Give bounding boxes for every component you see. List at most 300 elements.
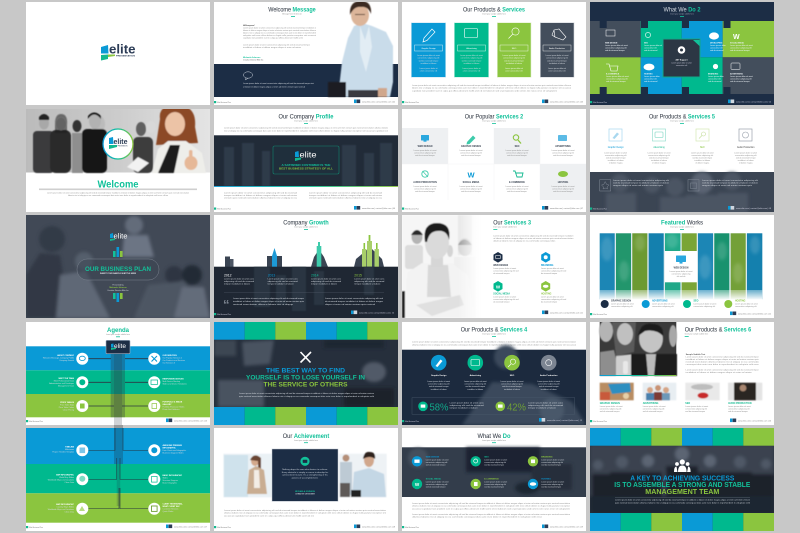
service: graphic design bbox=[460, 136, 483, 157]
card: seo: amet consectetur elit bbox=[505, 70, 523, 72]
item: price tables: PRICE TABLES bbox=[60, 401, 75, 404]
subtitle bbox=[670, 120, 694, 124]
band text: Lorem ipsum dolor sit amet consectetur adipiscing elit bbox=[702, 179, 759, 182]
thumb: graphic design: consectetur adipiscing elit bbox=[600, 408, 622, 410]
divider bar bbox=[39, 188, 197, 190]
service: web design: do eiusmod tempor bbox=[493, 272, 510, 275]
message text: Hi Everyone ! bbox=[243, 25, 255, 27]
item: responsive devices bbox=[148, 376, 187, 388]
item: timeline: TIMELINE bbox=[65, 446, 75, 448]
labels and text: Lorem ipsum dolor bbox=[708, 75, 724, 78]
quote text: do eiusmod tempor incididunt ut labore et dolore magna bbox=[325, 300, 384, 303]
feature: audio production: consectetur adipiscing elit bbox=[538, 383, 560, 386]
slide: welcome message bbox=[214, 1, 398, 105]
quote box: A SATISFIED CUSTOMER IS THE bbox=[282, 163, 331, 167]
feature: audio production: Lorem ipsum dolor sit amet bbox=[537, 380, 561, 383]
message text: Lorem ipsum dolor sit amet consectetur adipiscing elit sed do eiusmod tempor bbox=[243, 44, 310, 46]
center card: web design: consectetur adipiscing bbox=[672, 272, 690, 276]
service: hosting: consectetur adipiscing elit bbox=[552, 188, 574, 190]
timeline: 2014 bbox=[311, 274, 341, 286]
labels and text: W bbox=[733, 34, 740, 41]
subtitle bbox=[482, 439, 506, 443]
stat: 42 percent: Lorem ipsum dolor sit amet cons bbox=[528, 402, 563, 404]
logo box bbox=[106, 340, 130, 354]
feature: graphic design: et dolore magna bbox=[609, 162, 623, 164]
labels and text: consectetur adipiscing elit bbox=[730, 78, 752, 80]
footer bbox=[542, 310, 583, 315]
card: advertising: Lorem ipsum dolor sit amet bbox=[460, 54, 483, 57]
service: web design: consectetur adipiscing elit sed bbox=[493, 270, 519, 272]
timeline: 2015: tempor incididunt ut labore bbox=[354, 282, 380, 286]
band text bbox=[243, 82, 314, 88]
feature: graphic design: consectetur adipiscing elit bbox=[428, 383, 450, 386]
icon: team bbox=[674, 459, 691, 472]
item: e-commerce: Lorem ipsum dolor sit amet bbox=[484, 480, 508, 483]
footer bbox=[402, 524, 583, 529]
item: meet the team: Meet Professional Team bbox=[54, 380, 74, 382]
item: hosting: HOSTING bbox=[735, 300, 746, 302]
item: basic infographic: Slides bbox=[162, 478, 168, 480]
footer bbox=[590, 100, 771, 104]
stat: 42 percent bbox=[496, 402, 563, 413]
footer bbox=[214, 310, 394, 316]
footer: www.elite.com | contact@elite.com | 04 bbox=[736, 101, 771, 104]
service: audio production: sed do eiusmod tempor bbox=[415, 190, 435, 193]
labels and text: consectetur elit bbox=[644, 46, 657, 50]
slide: key to achieving success quote bbox=[590, 428, 774, 531]
logo badge: PRESENTATION bbox=[118, 144, 127, 148]
subtitle bbox=[482, 13, 506, 17]
labels and text: HOSTING bbox=[644, 74, 653, 76]
slide: welcome bbox=[26, 105, 210, 212]
footer bbox=[402, 206, 583, 210]
item: social media: Lorem ipsum dolor sit amet bbox=[426, 480, 449, 483]
labels and text: sed do eiusmod tempor bbox=[606, 80, 626, 83]
photo: businesswoman and team bbox=[402, 215, 480, 318]
labels and text bbox=[605, 30, 753, 83]
service: social media: consectetur adipiscing elit bbox=[460, 188, 482, 190]
feature: seo: et dolore magna bbox=[695, 162, 710, 164]
center box: 24/7 support: consectetur elit bbox=[676, 64, 688, 67]
quote text: aliqua ut enim ad minim veniam quis nostrud bbox=[325, 303, 375, 306]
item: price tables: Price Table Style bbox=[60, 404, 74, 406]
quote text: quis nostrud exercitation ullamco laboris nisi ut aliquip ex ea commodo consequat duis aute irure dolor in reprehenderit in voluptate velit bbox=[239, 395, 375, 398]
body text: consequat duis aute irure dolor in reprehenderit in voluptate velit esse bbox=[686, 363, 759, 366]
item: client testimonial: Quote Slides bbox=[162, 510, 173, 513]
navy band bbox=[214, 64, 398, 97]
pill heading: OUR BUSINESS PLAN bbox=[85, 266, 152, 273]
item: branding: consectetur adipiscing elit bbox=[541, 461, 563, 464]
timeline: 2013: adipiscing elit sed do eiusmod bbox=[268, 280, 298, 283]
footer: Elite Business Plan bbox=[405, 208, 419, 210]
service: hosting: consectetur adipiscing elit sed bbox=[541, 298, 566, 301]
band text: sed do eiusmod tempor incididunt ut labore et dolore bbox=[613, 182, 669, 184]
title: Company Growth bbox=[283, 220, 329, 227]
service: hosting: sed do eiusmod tempor bbox=[553, 190, 573, 193]
item: portfolio and image gallery: Photo Grid Galleries bbox=[162, 408, 180, 411]
subtitle bbox=[482, 333, 506, 337]
icon: bars bottom bbox=[113, 293, 123, 302]
stats box bbox=[412, 398, 575, 414]
connectors bbox=[88, 359, 148, 406]
item: seo: consectetur adipiscing elit bbox=[484, 461, 506, 464]
center card: web design: Lorem ipsum dolor sit amet bbox=[670, 270, 693, 273]
item: our services: Our Popular Services 2 bbox=[162, 356, 182, 360]
logo: elite: elite bbox=[109, 42, 136, 56]
quote text: nostrud exercitation ullamco laboris nisi ut aliquip bbox=[233, 303, 293, 306]
quote heading: A KEY TO ACHIEVING SUCCESS bbox=[630, 475, 735, 482]
labels and text: consectetur elit bbox=[708, 78, 721, 80]
footer bbox=[402, 100, 583, 104]
item: e-commerce: sed do eiusmod tempor bbox=[484, 485, 504, 488]
feature: graphic design: Graphic Design bbox=[431, 374, 447, 377]
footer bbox=[26, 418, 207, 423]
title: Our Products & Services 6 bbox=[685, 327, 752, 334]
band text: Lorem ipsum dolor sit amet consectetur adipiscing elit sed do eiusmod tempor inci bbox=[243, 82, 315, 85]
card: advertising: incididunt ut labore bbox=[464, 62, 479, 65]
timeline: 2012: tempor incididunt ut labore bbox=[224, 282, 250, 286]
icon: screen bbox=[464, 28, 478, 38]
item: responsive devices: RESPONSIVE DEVICES bbox=[162, 378, 184, 380]
footer: www.elite.com | contact@elite.com | 18 bbox=[362, 526, 395, 529]
labels and text: sed do eiusmod bbox=[644, 50, 657, 52]
stat: 58 percent bbox=[418, 402, 484, 413]
presenter: Presented by bbox=[112, 283, 124, 286]
footer: www.elite.com | contact@elite.com | 06 bbox=[362, 207, 395, 210]
item: about company: Company Growth bbox=[59, 359, 74, 362]
item: our services: OUR SERVICES bbox=[162, 355, 177, 357]
service: hosting bbox=[552, 171, 575, 193]
item: price tables bbox=[59, 400, 88, 412]
grid cells bbox=[402, 128, 586, 200]
presenter: Michaela Johnson bbox=[109, 287, 127, 289]
item: meet the team: Management Team bbox=[58, 384, 74, 388]
item: portfolio and image gallery: PORTFOLIO & IMAGE bbox=[162, 400, 183, 404]
service: social media: do eiusmod tempor bbox=[493, 300, 510, 304]
title: What We Do bbox=[478, 433, 511, 440]
footer: Elite Business Plan bbox=[593, 313, 607, 316]
icon: teal badge bbox=[300, 457, 310, 466]
card: graphic design bbox=[411, 23, 446, 77]
footer: Elite Business Plan bbox=[29, 526, 43, 529]
card: advertising: amet consectetur elit bbox=[463, 70, 481, 72]
item: hosting bbox=[528, 479, 565, 489]
body text: ullamco laboris nisi ut aliquip ex ea commodo consequat duis aute irure dolor in reprehenderit in voluptate velit esse cillum dolore eu fugiat nulla pariatur excepteur sint bbox=[224, 512, 387, 515]
service: web design bbox=[414, 135, 437, 157]
card: audio production: amet consectetur elit bbox=[548, 70, 566, 72]
intro text: ullamco laboris nisi ut aliquip ex ea commodo consequat duis aute irure dolor in reprehenderit in voluptate velit esse cillum dolore eu fugiat nulla pariatur sint occaecat bbox=[412, 343, 577, 346]
subtitle: Insert your sample subtitle here bbox=[685, 333, 708, 336]
card: seo bbox=[497, 23, 531, 77]
thumb: graphic design: sed do eiusmod tempor bbox=[600, 410, 620, 413]
item: map infographic: MAP INFOGRAPHIC bbox=[56, 474, 75, 476]
feature: graphic design: Graphic Design bbox=[608, 146, 624, 149]
feature: seo bbox=[691, 129, 714, 164]
dark photo band bbox=[402, 345, 586, 425]
timeline: 2012 bbox=[224, 274, 254, 286]
item: branding: Lorem ipsum dolor sit amet bbox=[541, 458, 565, 461]
feature: audio production: consectetur adipiscing elit bbox=[735, 154, 757, 157]
card: audio production: Lorem ipsum dolor sit bbox=[548, 67, 567, 70]
body text: Lorem ipsum dolor sit amet consectetur adipiscing elit sed do eiusmod tempor incididunt ut labore et dolore magna aliqua ut enim ad minim veniam quis nostrud exercitation bbox=[412, 502, 570, 505]
card: advertising bbox=[454, 23, 489, 77]
icon: pencil bbox=[423, 29, 435, 42]
logo: elite bbox=[114, 234, 128, 240]
service: web design: consectetur adipiscing elit bbox=[414, 152, 436, 154]
item: client testimonial: WHAT CLIENT SAY bbox=[162, 505, 180, 508]
service: web design: WEB DESIGN bbox=[418, 146, 433, 148]
stat: 42 percent: tempor incididunt ut labore bbox=[528, 406, 556, 410]
slide: our products and services 5 bbox=[590, 109, 774, 213]
footer: Elite Business Plan bbox=[217, 313, 231, 316]
item: web design: Lorem ipsum dolor sit amet bbox=[426, 458, 449, 461]
service: web design: Lorem ipsum dolor sit amet bbox=[414, 149, 437, 152]
center card: Every obstacle is simply a course to develop his bbox=[282, 471, 329, 474]
feature: graphic design: Lorem ipsum dolor sit amet bbox=[427, 380, 451, 383]
stat: 58 percent: 58% bbox=[430, 402, 449, 413]
service: graphic design: Lorem ipsum dolor sit amet bbox=[460, 149, 483, 152]
item: branding bbox=[528, 456, 565, 466]
card: audio production: Audio Production bbox=[549, 47, 566, 50]
item: awesome premium infographic: Data Charts and Infographic bbox=[162, 449, 186, 452]
item: meet the team: MEET THE TEAM bbox=[59, 377, 74, 380]
quote text bbox=[233, 297, 384, 306]
logo badge: elite bbox=[114, 137, 128, 146]
footer bbox=[214, 524, 395, 529]
item: meet the team bbox=[49, 376, 88, 388]
item: social media: consectetur adipiscing elit bbox=[426, 483, 448, 486]
photo: business people bbox=[26, 105, 210, 173]
logo box: elite bbox=[114, 343, 126, 350]
icon: speech bubble bbox=[243, 72, 253, 80]
title: Our Popular Services 2 bbox=[465, 114, 524, 121]
service: seo bbox=[506, 135, 529, 157]
signature: Michaela Johnson bbox=[243, 57, 261, 59]
intro text bbox=[493, 234, 574, 242]
item: seo: sed do eiusmod tempor bbox=[484, 463, 504, 466]
icon: bars top bbox=[113, 247, 123, 257]
item: awesome premium infographic: INFOGRAPHIC bbox=[162, 446, 176, 450]
feature: seo: consectetur adipiscing elit bbox=[691, 154, 714, 157]
body text: Lorem ipsum dolor sit amet consectetur adipiscing elit sed do eiusmod tempor incididunt ut labore et dolore magna aliqua ut enim ad minim veniam quis nostrud exercitation bbox=[412, 513, 570, 516]
service: e-commerce: sed do eiusmod tempor bbox=[507, 190, 527, 193]
colored bands bbox=[26, 428, 210, 523]
feature: audio production: sed do eiusmod tempor bbox=[539, 385, 559, 388]
subtitle bbox=[106, 333, 130, 337]
card: audio production: incididunt ut labore bbox=[549, 62, 565, 65]
center card: Nothing drops the man who desires to achieve. bbox=[282, 468, 328, 471]
intro text bbox=[412, 340, 577, 346]
feature: audio production: Audio Production bbox=[540, 374, 558, 377]
quote box: elite bbox=[300, 150, 317, 160]
labels and text: SEO bbox=[644, 42, 649, 44]
pill heading: INSERT YOUR SAMPLE SUBTITLE HERE bbox=[100, 272, 137, 275]
slide: what we do bbox=[402, 428, 586, 531]
item: about company: Welcome Message, Company Profile bbox=[43, 356, 74, 360]
item: seo: Lorem ipsum dolor sit amet bbox=[484, 458, 508, 461]
title: Welcome Message bbox=[268, 7, 316, 14]
footer: Elite Business Plan bbox=[405, 526, 419, 529]
subtitle bbox=[294, 120, 318, 124]
band text bbox=[613, 179, 759, 187]
center box: 24/7 support bbox=[663, 39, 700, 77]
service: e-commerce: Lorem ipsum dolor sit amet bbox=[506, 185, 529, 188]
skyline buildings bbox=[225, 235, 384, 267]
intro text: nisi ut aliquip ex ea commodo consequat duis aute irure dolor in reprehenderit in voluptate velit esse cillum dolore eu fugiat nulla pariatur excepteur sint occaecat cupidatat non bbox=[224, 129, 388, 132]
feature: advertising: incididunt ut labore bbox=[651, 159, 667, 162]
city band bbox=[214, 135, 398, 187]
footer: www.elite.com | contact@elite.com | 08 bbox=[736, 207, 771, 210]
icon: speaker bbox=[552, 29, 566, 40]
service: graphic design: sed do eiusmod tempor bbox=[461, 154, 481, 157]
feature: audio production bbox=[537, 355, 561, 391]
subtitle bbox=[294, 226, 318, 230]
footer: www.elite.com | contact@elite.com | 07 bbox=[550, 207, 583, 210]
labels and text: E-COMMERCE bbox=[606, 74, 620, 76]
service: social media: W bbox=[496, 284, 501, 289]
subtitle: Insert your sample subtitle here bbox=[670, 120, 694, 123]
subtitle bbox=[294, 439, 318, 443]
connectors bbox=[88, 428, 148, 509]
center card bbox=[272, 449, 338, 501]
quote text: Lorem ipsum dolor sit amet consectetur adipiscing elit sed do eiusmod tempor bbox=[233, 297, 304, 300]
quote text: incididunt ut labore et dolore magna aliqua ut enim ad minim veniam quis bbox=[233, 300, 304, 303]
item: advertising: consectetur adipiscing elit bbox=[652, 305, 674, 308]
center card: MICHAELA JOHNSON bbox=[295, 490, 316, 493]
slide: our popular services 2 bbox=[402, 109, 586, 212]
photo: man with colleague bbox=[339, 452, 387, 497]
subtitle: Insert your sample subtitle here bbox=[482, 120, 506, 123]
item: seo: SEO bbox=[694, 300, 699, 302]
thumb: advertising bbox=[643, 383, 676, 413]
logo bbox=[110, 233, 128, 241]
photo: desk bbox=[214, 340, 394, 407]
item: graphic design: GRAPHIC DESIGN bbox=[611, 300, 631, 302]
item: map infographic second: Country Maps Slides bbox=[57, 506, 74, 508]
item: web design: sed do eiusmod tempor bbox=[426, 463, 446, 466]
band text: ut labore et dolore magna aliqua ut enim ad minim veniam quis nostrud bbox=[243, 86, 305, 88]
thumb: graphic design bbox=[600, 383, 634, 413]
footer: Elite Business Plan bbox=[405, 420, 419, 423]
footer: www.elite.com | contact@elite.com | 03 bbox=[550, 101, 583, 104]
service: e-commerce: consectetur adipiscing elit bbox=[506, 188, 528, 190]
item: seo: SEO bbox=[484, 457, 489, 459]
item: client testimonial: Customer Reviews bbox=[162, 508, 178, 510]
subtitle bbox=[282, 13, 302, 17]
labels and text: sed do eiusmod bbox=[708, 81, 721, 83]
thumb: seo bbox=[685, 383, 720, 413]
intro text: ut labore et dolore magna aliqua ut enim ad minim veniam quis nostrud exercitation bbox=[493, 237, 573, 240]
mosaic bottom bbox=[214, 407, 398, 425]
center box: 24/7 support: Lorem ipsum dolor sit amet bbox=[671, 62, 692, 64]
footer: Elite Business Plan bbox=[29, 420, 43, 423]
dark city band bbox=[214, 267, 398, 318]
labels and text: Lorem ipsum dolor sit bbox=[644, 44, 663, 47]
item: social media: SOCIAL MEDIA bbox=[426, 478, 441, 481]
title: Our Services 3 bbox=[493, 220, 531, 227]
band text: magna aliqua ut enim ad minim veniam quis bbox=[613, 184, 663, 187]
message text: voluptate velit esse cillum dolore eu fugiat nulla pariatur excepteur sint occaecat bbox=[243, 34, 317, 37]
title: Our Company Profile bbox=[278, 114, 334, 121]
message text: incididunt ut labore et dolore magna aliqua ut enim ad minim bbox=[243, 46, 301, 49]
item: hosting: sed do eiusmod tempor bbox=[541, 485, 561, 488]
feature: audio production: sed do eiusmod tempor bbox=[736, 156, 756, 160]
body text: Lorem ipsum dolor sit amet consectetur adipiscing elit sed do eiusmod tempor incididunt ut labore et dolore magna aliqua ut enim ad minim veniam quis nostrud exercitation bbox=[224, 509, 386, 512]
subtitle: Insert your sample subtitle here bbox=[294, 226, 318, 229]
slide: our products and services 6 bbox=[590, 320, 774, 425]
service: social media: sed do eiusmod tempor bbox=[461, 190, 481, 193]
card: audio production: Lorem ipsum dolor sit amet bbox=[546, 54, 569, 57]
service: audio production: AUDIO PRODUCTION bbox=[413, 181, 437, 184]
body text bbox=[412, 84, 571, 92]
signature bbox=[243, 56, 264, 60]
footer bbox=[590, 206, 771, 210]
photo: management team bbox=[590, 445, 774, 514]
card: graphic design: Graphic Design bbox=[421, 47, 437, 50]
labels and text: sed do eiusmod tempor bbox=[730, 80, 750, 83]
service: graphic design: consectetur adipiscing elit bbox=[460, 152, 482, 154]
stat: 58 percent: adipiscing elit sed do eiusmod bbox=[450, 404, 484, 407]
item: seo: consectetur adipiscing elit bbox=[694, 305, 716, 308]
feature: graphic design: incididunt ut labore bbox=[431, 388, 447, 391]
labels and text: consectetur elit bbox=[644, 78, 657, 80]
footer: www.elite.com | contact@elite.com | 02 bbox=[362, 101, 395, 104]
feature: seo bbox=[501, 355, 524, 391]
quote mark: “ bbox=[223, 297, 230, 312]
quote heading: IS TO ASSEMBLE A STRONG AND STABLE bbox=[614, 482, 751, 489]
quote heading: YOURSELF IS TO LOSE YOURSELF IN bbox=[246, 375, 365, 382]
body text: incididunt ut labore et dolore magna aliqua ut enim ad minim veniam quis bbox=[686, 358, 759, 361]
photo: meeting bbox=[26, 216, 210, 318]
quote box bbox=[273, 146, 339, 174]
timeline: 2014: 2014 bbox=[311, 274, 319, 278]
feature: audio production: Audio Production bbox=[737, 146, 755, 149]
icon: lifebuoy bbox=[678, 46, 685, 54]
service: hosting: HOSTING bbox=[558, 182, 568, 184]
service: seo: SEO bbox=[515, 146, 520, 148]
service: advertising: Lorem ipsum dolor sit amet bbox=[552, 149, 575, 152]
footer: Elite Business Plan bbox=[405, 101, 419, 104]
footer: www.elite.com | contact@elite.com | 13 bbox=[174, 420, 207, 423]
service: hosting: HOSTING bbox=[541, 294, 552, 296]
card: seo: Lorem ipsum dolor sit amet bbox=[503, 54, 526, 57]
item: seo: Lorem ipsum dolor sit amet bbox=[694, 302, 717, 306]
card: graphic design: amet consectetur elit bbox=[420, 70, 438, 72]
message text bbox=[243, 25, 317, 49]
feature: audio production: incididunt ut labore bbox=[541, 388, 557, 391]
subtitle bbox=[493, 226, 517, 230]
slide: our services 3 bbox=[402, 215, 586, 318]
item: map infographic bbox=[48, 473, 88, 485]
labels and text: Lorem ipsum dolor sit amet bbox=[605, 44, 628, 47]
subtitle bbox=[670, 226, 694, 230]
item: portfolio and image gallery: Portfolio Showcase Slides bbox=[162, 406, 184, 408]
subtitle bbox=[685, 333, 708, 337]
text columns: veniam quis nostrud exercitation ullamco laboris nisi ut aliquip ex ea bbox=[224, 196, 298, 200]
message text: labore et dolore magna aliqua ut enim ad minim veniam quis nostrud exercitation ullamco bbox=[243, 29, 316, 32]
intro text: Lorem ipsum dolor sit amet consectetur adipiscing elit sed do eiusmod tempor incididunt bbox=[493, 234, 574, 238]
footer: Elite Business Plan bbox=[217, 208, 231, 210]
labels and text: consectetur adipiscing elit bbox=[730, 46, 752, 50]
item: seo bbox=[470, 456, 508, 466]
service: branding: BRANDING bbox=[541, 264, 554, 267]
title: Our Products & Services 5 bbox=[649, 114, 715, 121]
service: social media: consectetur adipiscing elit sed bbox=[493, 298, 519, 301]
feature: graphic design bbox=[604, 129, 628, 164]
item: map infographic second: MAP INFOGRAPHIC bbox=[56, 503, 75, 506]
band text: sed do eiusmod tempor incididunt ut labore et dolore bbox=[702, 182, 758, 184]
feature: graphic design: incididunt ut labore bbox=[608, 159, 624, 162]
